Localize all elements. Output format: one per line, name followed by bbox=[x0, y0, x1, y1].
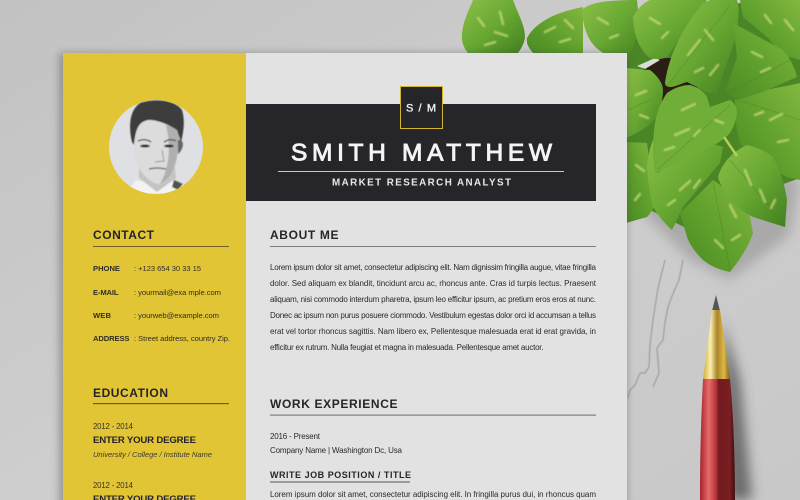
address row: : Street address, country Zip. bbox=[134, 334, 230, 343]
education entry 2: 2012 - 2014 bbox=[93, 481, 134, 490]
education entry 1: 2012 - 2014 bbox=[93, 422, 134, 431]
resume paper bbox=[63, 53, 627, 500]
work experience section bbox=[270, 397, 596, 499]
about me paragraph: Donec ac ipsum non purus posuere ciommodo. Vestibulum egestas dolor orci id accumsan a tellus bbox=[270, 311, 596, 320]
phone row bbox=[93, 264, 201, 273]
about me paragraph: aliquam, nisi commodo interdum pharetra, ipsum leo efficitur ipsum, ac pretium eros eros at nunc. bbox=[270, 295, 596, 304]
education entry 2 bbox=[93, 481, 197, 500]
monogram box: S/M bbox=[406, 102, 436, 114]
ear bbox=[178, 140, 183, 154]
neck bbox=[138, 167, 176, 192]
plant shadow on wall bbox=[630, 130, 800, 280]
leaf stem bbox=[724, 137, 737, 156]
pen shadow bbox=[722, 320, 752, 500]
pen gold nib bbox=[703, 310, 730, 379]
yellow sidebar bbox=[63, 53, 246, 500]
education entry 1: University / College / Institute Name bbox=[93, 450, 212, 459]
leaf: upper middle bbox=[633, 0, 707, 59]
about me paragraph: Lorem ipsum dolor sit amet, consectetur adipiscing elit. Nam dignissim fringilla augue, vitae fringilla bbox=[270, 263, 597, 272]
pen red body bbox=[700, 379, 735, 500]
education entry 1: ENTER YOUR DEGREE bbox=[93, 435, 197, 446]
pen tip bbox=[712, 295, 720, 311]
leaf: upper right pointed bbox=[725, 23, 797, 100]
leaf variegation bbox=[478, 12, 793, 248]
heading: education: EDUCATION bbox=[93, 386, 168, 400]
dates and company bbox=[270, 432, 403, 455]
web row: : yourweb@example.com bbox=[134, 311, 219, 320]
paper shadow bbox=[59, 53, 627, 500]
education section bbox=[93, 386, 229, 500]
phone row: : +123 654 30 33 15 bbox=[134, 264, 201, 273]
about me paragraph: efficitur ex rutrum. Nulla feugiat et magna in malesuada. Pellentesque amet auctor. bbox=[270, 343, 544, 352]
leaf: right middle bbox=[735, 83, 800, 180]
name: SMITH MATTHEW bbox=[291, 140, 553, 166]
nose and mouth bbox=[149, 150, 166, 169]
contact section bbox=[93, 228, 230, 343]
e-mail row: E-MAIL bbox=[93, 288, 119, 297]
education entry 1 bbox=[93, 422, 212, 459]
heading: work experience: WORK EXPERIENCE bbox=[270, 397, 398, 411]
red pen bbox=[700, 295, 735, 500]
job title: MARKET RESEARCH ANALYST bbox=[332, 178, 511, 188]
web row: WEB bbox=[93, 311, 112, 320]
leaf: left lower bbox=[626, 142, 657, 223]
e-mail row: : yourmail@exa mple.com bbox=[134, 288, 221, 297]
leaf: top right back bbox=[740, 0, 800, 60]
monogram box bbox=[400, 86, 442, 128]
leaf: centre front bbox=[653, 85, 737, 173]
dates and company: 2016 - Present bbox=[270, 432, 321, 441]
leaf midribs bbox=[628, 5, 800, 270]
about me paragraph: dolor. Sed aliquam ex blandit, tincidunt arcu ac, rhoncus ante. Cras id turpis lectus. Praesent bbox=[270, 279, 597, 288]
face bbox=[134, 119, 169, 184]
plant: pothos leaves bbox=[462, 0, 800, 272]
e-mail row bbox=[93, 288, 221, 297]
name banner bbox=[246, 86, 596, 201]
web row bbox=[93, 311, 219, 320]
heading: about me: ABOUT ME bbox=[270, 228, 338, 242]
leaf: top centre 2 bbox=[582, 0, 640, 62]
about me paragraph bbox=[270, 263, 597, 352]
leaf: top centre bbox=[527, 7, 583, 53]
dates and company: Company Name | Washington Dc, Usa bbox=[270, 446, 403, 455]
about me section bbox=[270, 228, 597, 352]
plant base foliage and soil bbox=[627, 0, 800, 230]
job description: Lorem ipsum dolor sit amet, consectetur adipiscing elit. In fringilla purus dui, in rhoncus quam bbox=[270, 490, 596, 499]
leaf: upper big bbox=[665, 0, 739, 93]
leaf: behind paper right upper bbox=[626, 68, 663, 138]
wall cracks bbox=[628, 260, 683, 398]
leaf: top left bbox=[462, 0, 525, 53]
profile photo bbox=[109, 100, 203, 194]
eyebrows bbox=[138, 140, 176, 142]
job title heading: WRITE JOB POSITION / TITLE bbox=[270, 470, 411, 480]
eyes bbox=[140, 144, 174, 148]
phone row: PHONE bbox=[93, 264, 120, 273]
heading: contact: CONTACT bbox=[93, 228, 155, 242]
leaf: lower right bbox=[718, 145, 787, 227]
leaf: bottom point bbox=[680, 180, 753, 272]
hair bbox=[130, 100, 184, 145]
about me paragraph: erat vel tortor rhoncus sagittis. Nam libero ex, Pellentesque malesuada erat id erat gravida, in bbox=[270, 327, 596, 336]
address row: ADDRESS bbox=[93, 334, 130, 343]
shirt bbox=[130, 180, 184, 194]
leaf: lower left cluster bbox=[647, 140, 723, 230]
